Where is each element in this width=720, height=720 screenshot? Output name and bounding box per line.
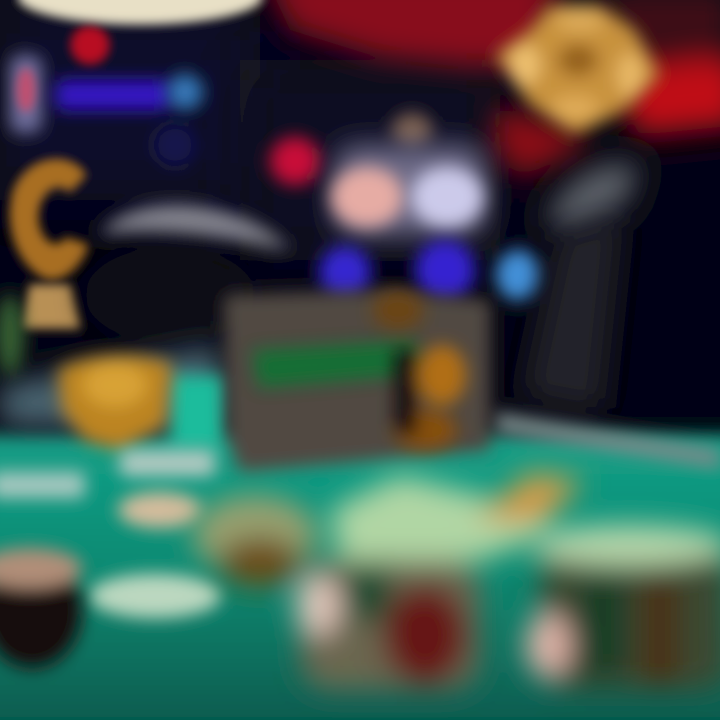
plate: pale dish [89, 574, 221, 618]
lamp: cream ceiling light [18, 0, 262, 24]
chip: dark stack bottom left [0, 548, 82, 668]
arc: grey dome [85, 205, 290, 343]
cards: pale stacks left [0, 450, 215, 528]
icon: gold crown ornament [495, 5, 660, 135]
ceiling: red canopy [262, 0, 720, 178]
panel: grey shape right [525, 163, 640, 410]
icon: red ball [270, 137, 320, 185]
panel: grey-brown box [224, 290, 490, 472]
sign: neon lights upper left [10, 26, 203, 167]
chips: right pile [526, 525, 720, 690]
table: green felt [0, 295, 720, 720]
figures: pink and lavender characters [319, 113, 540, 300]
green band [252, 340, 420, 388]
trophy: gold letter on left [10, 159, 88, 328]
icon: gold cup [58, 355, 172, 450]
chips: centre pile [193, 472, 585, 690]
orange figure [372, 290, 466, 450]
